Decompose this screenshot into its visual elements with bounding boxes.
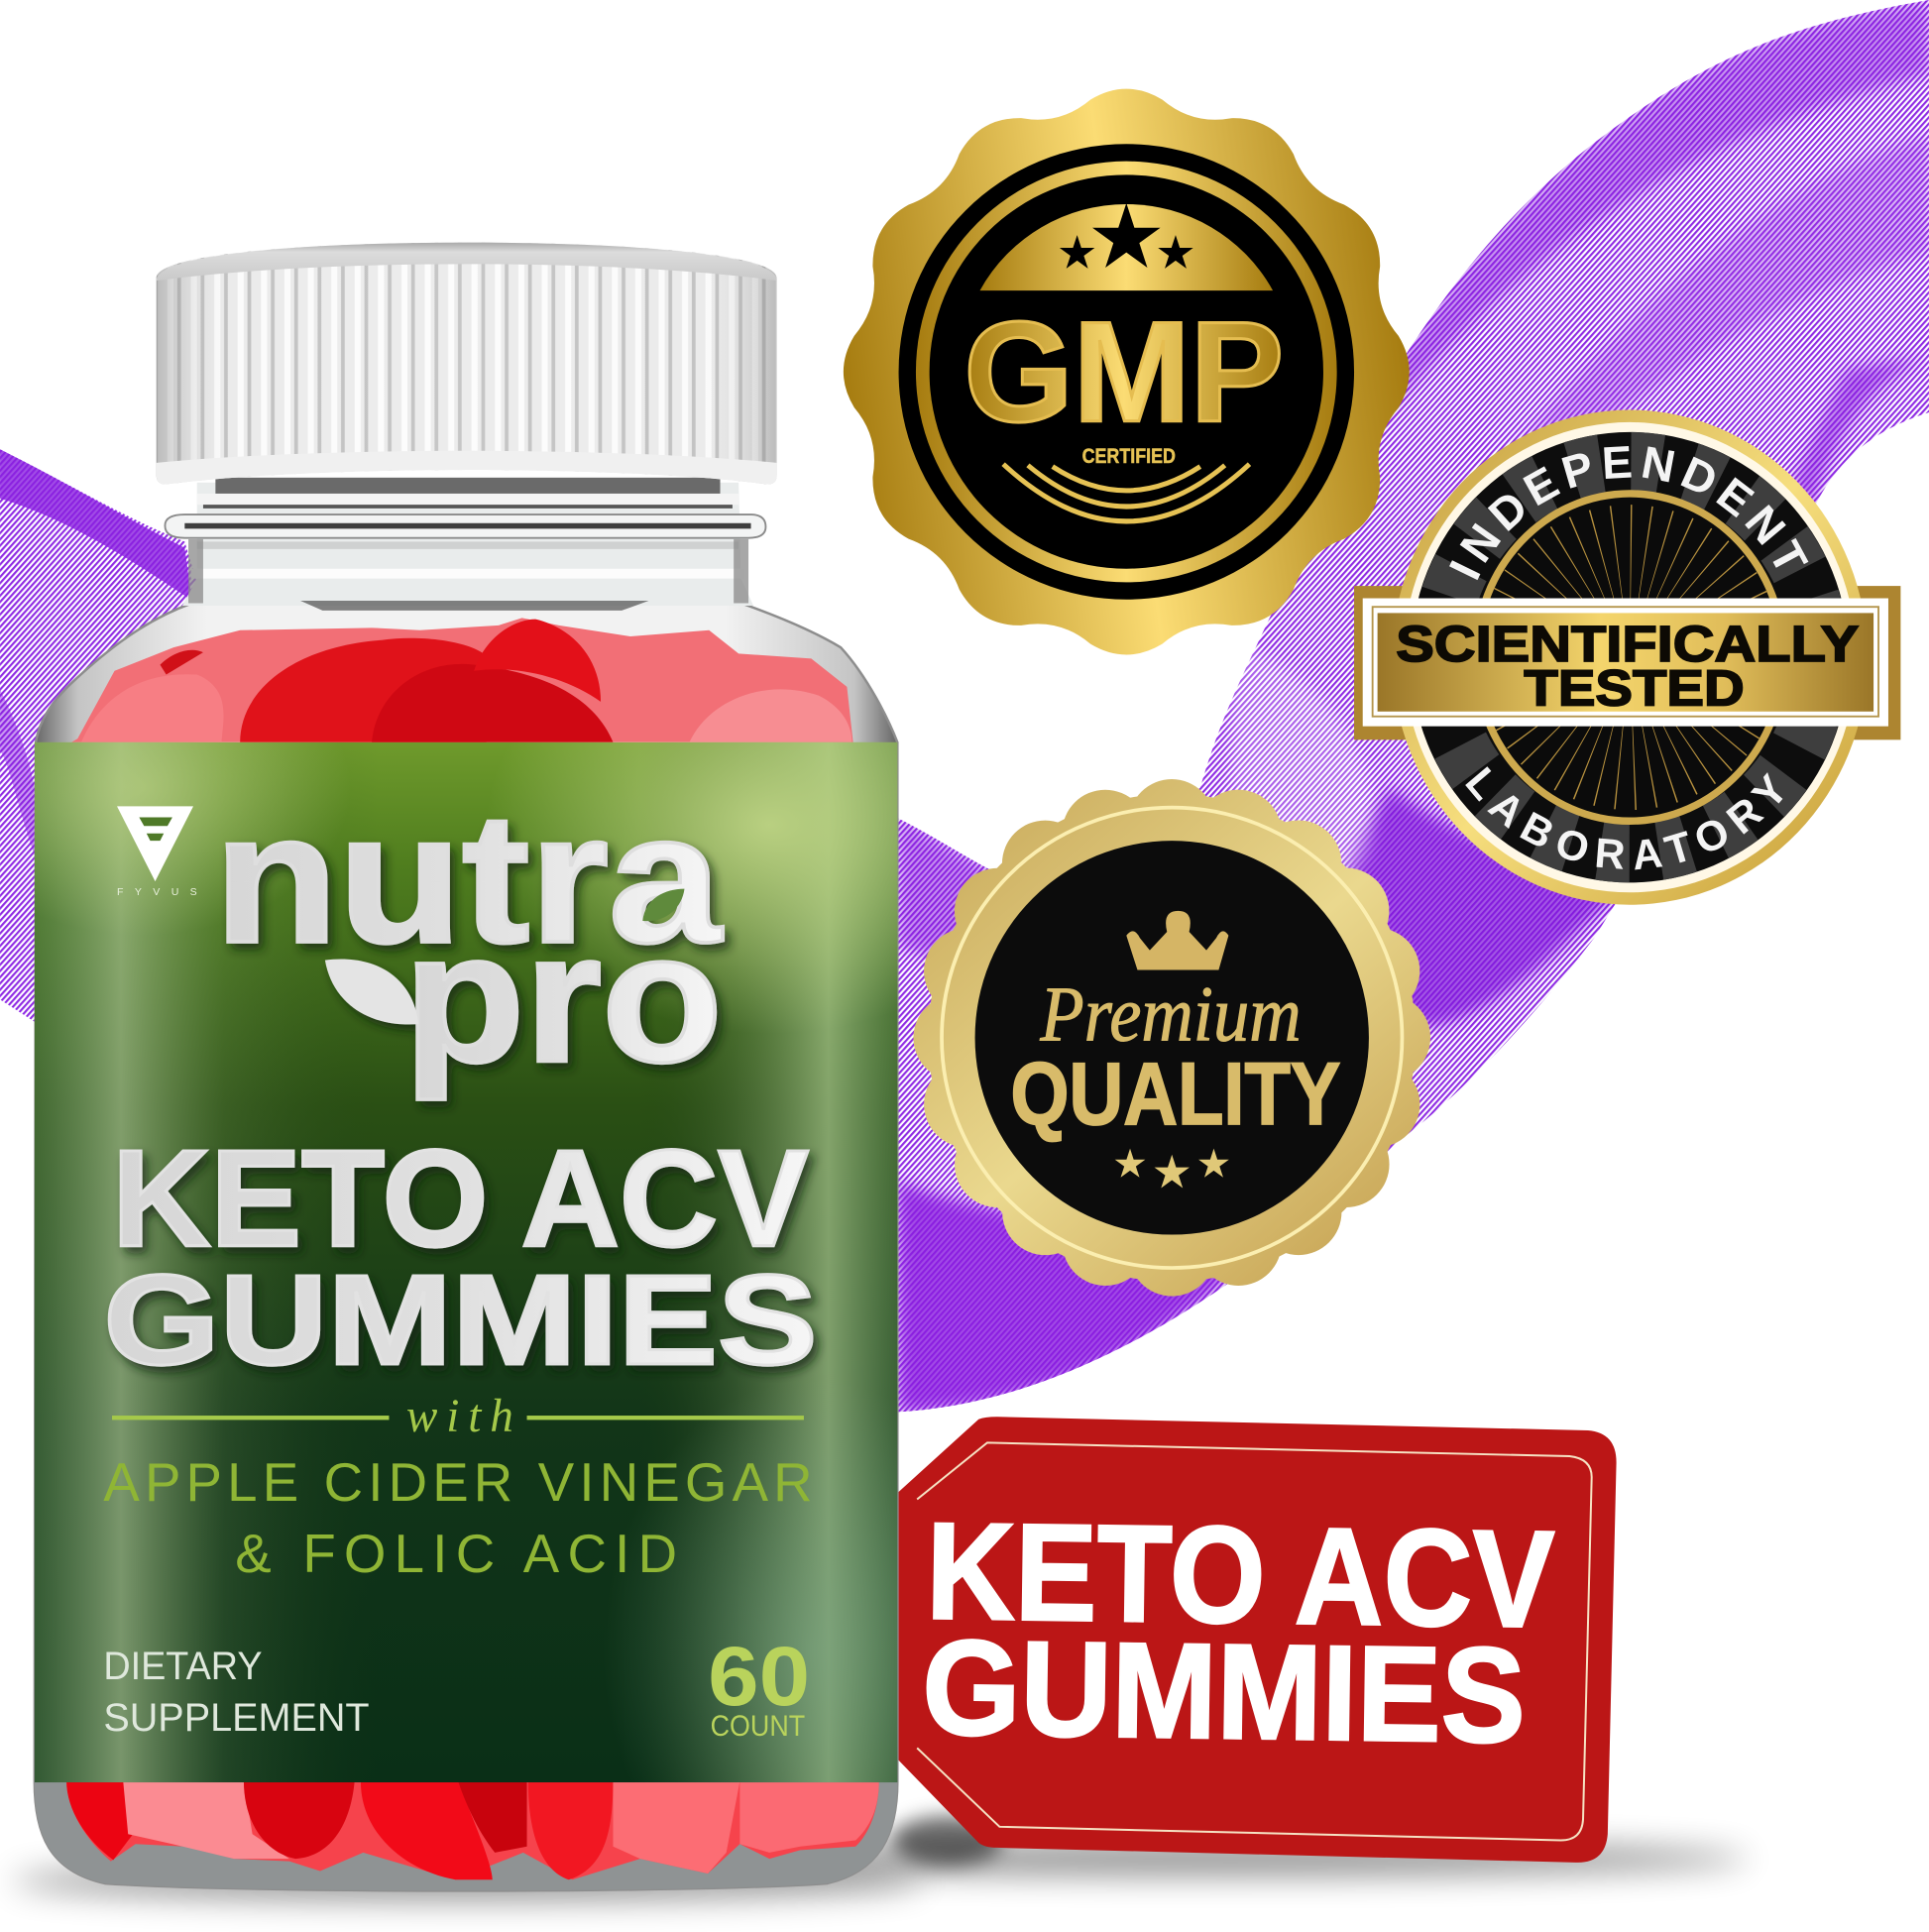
dome with stars [980, 204, 1273, 290]
tag text: GUMMIES [921, 1611, 1527, 1771]
brand name: nutra pro: nutra [214, 775, 723, 981]
curved text: INDEPENDENT [1449, 446, 1808, 581]
badge: GMP certified [811, 57, 1441, 687]
purple ribbon: right sweep [899, 0, 1929, 1412]
product name: keto acv gummies: KETO ACV [112, 1122, 809, 1276]
badge: premium quality [928, 794, 1416, 1282]
brand name: nutra pro [214, 775, 723, 1100]
tag text: KETO ACV [926, 1494, 1555, 1656]
badge: GMP certified: CERTIFIED [1082, 445, 1176, 468]
dietary supplement: DIETARY [103, 1645, 263, 1688]
badge: independent laboratory scientifically tested [1354, 410, 1901, 905]
bottle cap [157, 243, 777, 484]
three stars [1115, 1149, 1229, 1189]
badge: premium quality: QUALITY [1011, 1044, 1340, 1143]
ingredients: APPLE CIDER VINEGAR [103, 1452, 813, 1513]
product name: keto acv gummies [103, 1122, 818, 1392]
banner [1363, 599, 1888, 727]
ingredients: & FOLIC ACID [235, 1524, 677, 1584]
count: COUNT [711, 1710, 805, 1743]
green product label [34, 741, 898, 1782]
dietary supplement [103, 1645, 370, 1740]
brand logo: Fyvus [117, 806, 197, 898]
dietary supplement: SUPPLEMENT [103, 1696, 370, 1740]
bottle neck [165, 478, 765, 611]
with divider: with [406, 1391, 513, 1442]
badge: independent laboratory scientifically tested: SCIENTIFICALLY [1396, 616, 1859, 672]
gummies above label [71, 618, 853, 742]
leaf mark [325, 959, 418, 1025]
crown [1126, 911, 1228, 970]
bottle base glass [35, 1781, 897, 1890]
purple ribbon: left [0, 449, 203, 1022]
ingredients [103, 1452, 813, 1584]
tag text [921, 1494, 1555, 1771]
brand name: nutra pro: pro [403, 894, 723, 1100]
ground shadow [12, 1816, 1748, 1900]
arcs [1003, 464, 1249, 521]
GMP text: GMP [964, 292, 1284, 452]
bottom gummies [66, 1781, 879, 1879]
bottle glass body [35, 603, 897, 1890]
product bottle [34, 242, 899, 1892]
brand logo: Fyvus: FYVUS [117, 886, 197, 898]
sunburst rays [1553, 581, 1706, 734]
red tag [899, 1417, 1617, 1863]
banner back ears [1354, 586, 1900, 739]
count: 60 [708, 1630, 810, 1723]
badge: independent laboratory scientifically tested: TESTED [1524, 660, 1745, 717]
premium text: Premium [1039, 970, 1302, 1058]
with divider [112, 1391, 804, 1442]
leaf inside letter a [642, 889, 684, 921]
badge: independent laboratory scientifically tested: LABORATORY [1465, 766, 1782, 870]
product name: keto acv gummies: GUMMIES [103, 1249, 818, 1392]
